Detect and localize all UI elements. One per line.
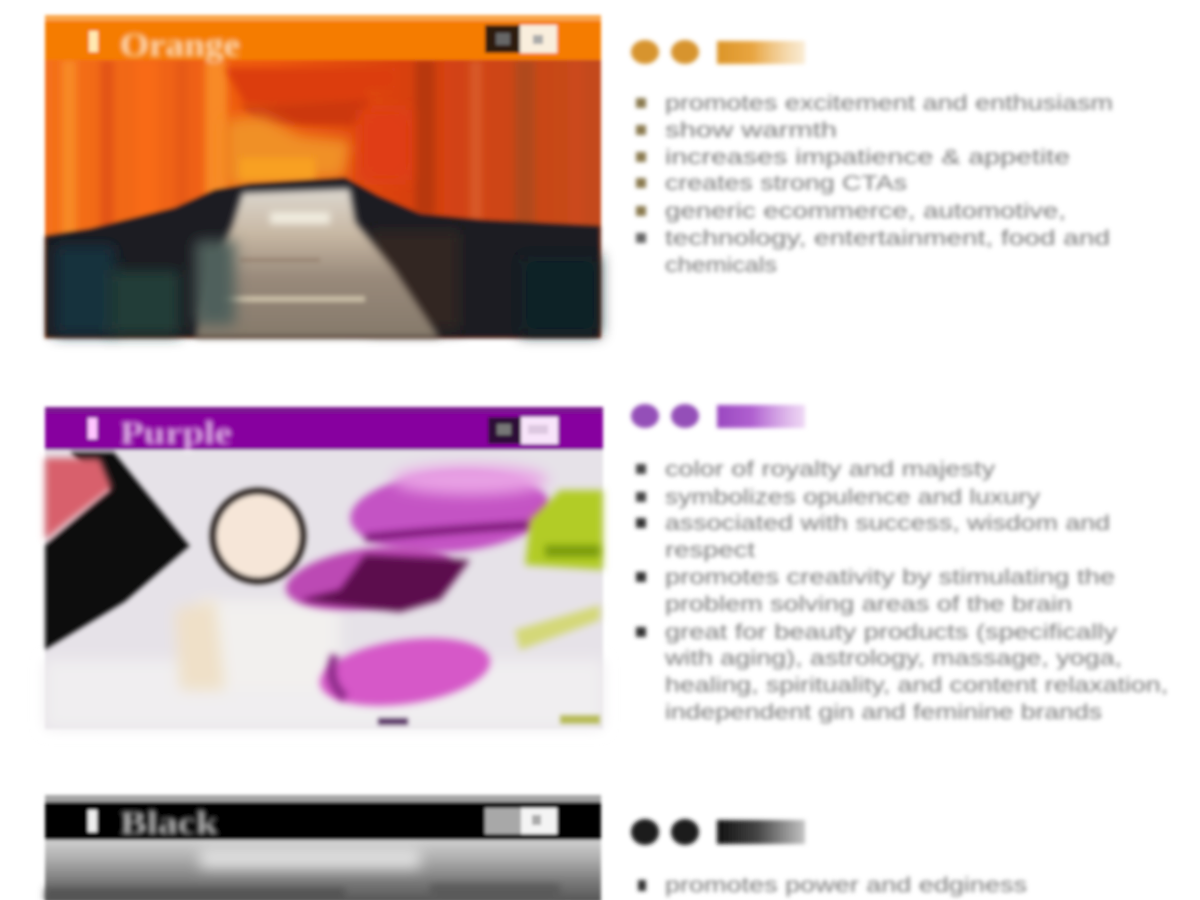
icon: title marker bbox=[89, 31, 98, 52]
title: Purple: Purple bbox=[120, 415, 232, 452]
banner: orange title bar bbox=[45, 15, 601, 64]
button: dark bbox=[488, 417, 521, 444]
text: orange list: show warmth bbox=[665, 119, 837, 142]
text: orange list bbox=[665, 92, 1113, 277]
panel: black photo card bbox=[45, 795, 601, 900]
heading: orange section bbox=[631, 40, 805, 64]
icon: title marker bbox=[88, 810, 97, 832]
text: purple list: associated with success, wisdom and bbox=[665, 512, 1110, 535]
list: orange bullets bbox=[636, 92, 1113, 277]
text: purple list: healing, spirituality, and content relaxation, bbox=[665, 674, 1168, 697]
title: Orange: Orange bbox=[120, 27, 240, 64]
photo: orange torii gate tunnel bbox=[45, 58, 601, 338]
text: orange list: increases impatience & appetite bbox=[665, 146, 1070, 169]
banner: black title bar bbox=[45, 795, 601, 842]
text: purple list: great for beauty products (specifically bbox=[665, 621, 1118, 644]
text: purple list: symbolizes opulence and luxury bbox=[665, 486, 1041, 509]
photo: grey monochrome landscape bbox=[45, 838, 601, 900]
text: purple list: color of royalty and majesty bbox=[665, 458, 996, 481]
list: purple bullets bbox=[636, 458, 1168, 724]
photo: make-up and purple tulips bbox=[45, 447, 603, 729]
panel: purple photo card bbox=[45, 407, 603, 729]
icon: title marker bbox=[88, 418, 97, 439]
text: orange list: chemicals bbox=[665, 254, 777, 277]
panel: orange photo card bbox=[45, 15, 601, 338]
button: white bbox=[521, 808, 557, 834]
button: grey bbox=[485, 808, 521, 834]
title: Black: Black bbox=[120, 805, 218, 842]
banner: purple title bar bbox=[45, 407, 603, 452]
heading: purple section bbox=[631, 404, 805, 428]
list: black bullets bbox=[638, 874, 1027, 897]
button: light bbox=[520, 25, 557, 53]
button: dark bbox=[485, 25, 520, 53]
text: orange list: creates strong CTAs bbox=[665, 172, 907, 195]
text: black list: promotes power and edginess bbox=[665, 874, 1027, 897]
heading: black section bbox=[631, 819, 805, 845]
text: purple list bbox=[664, 458, 1168, 724]
button: light bbox=[521, 417, 558, 444]
text: purple list: promotes creativity by stimulating the bbox=[665, 566, 1115, 589]
text: orange list: generic ecommerce, automotive, bbox=[665, 200, 1066, 223]
text: orange list: promotes excitement and enthusiasm bbox=[665, 92, 1113, 115]
text: purple list: with aging), astrology, massage, yoga, bbox=[664, 647, 1122, 670]
text: orange list: technology, entertainment, food and bbox=[665, 227, 1110, 250]
text: purple list: problem solving areas of the brain bbox=[665, 593, 1072, 616]
text: purple list: independent gin and feminine brands bbox=[665, 701, 1102, 724]
text: purple list: respect bbox=[665, 539, 755, 562]
